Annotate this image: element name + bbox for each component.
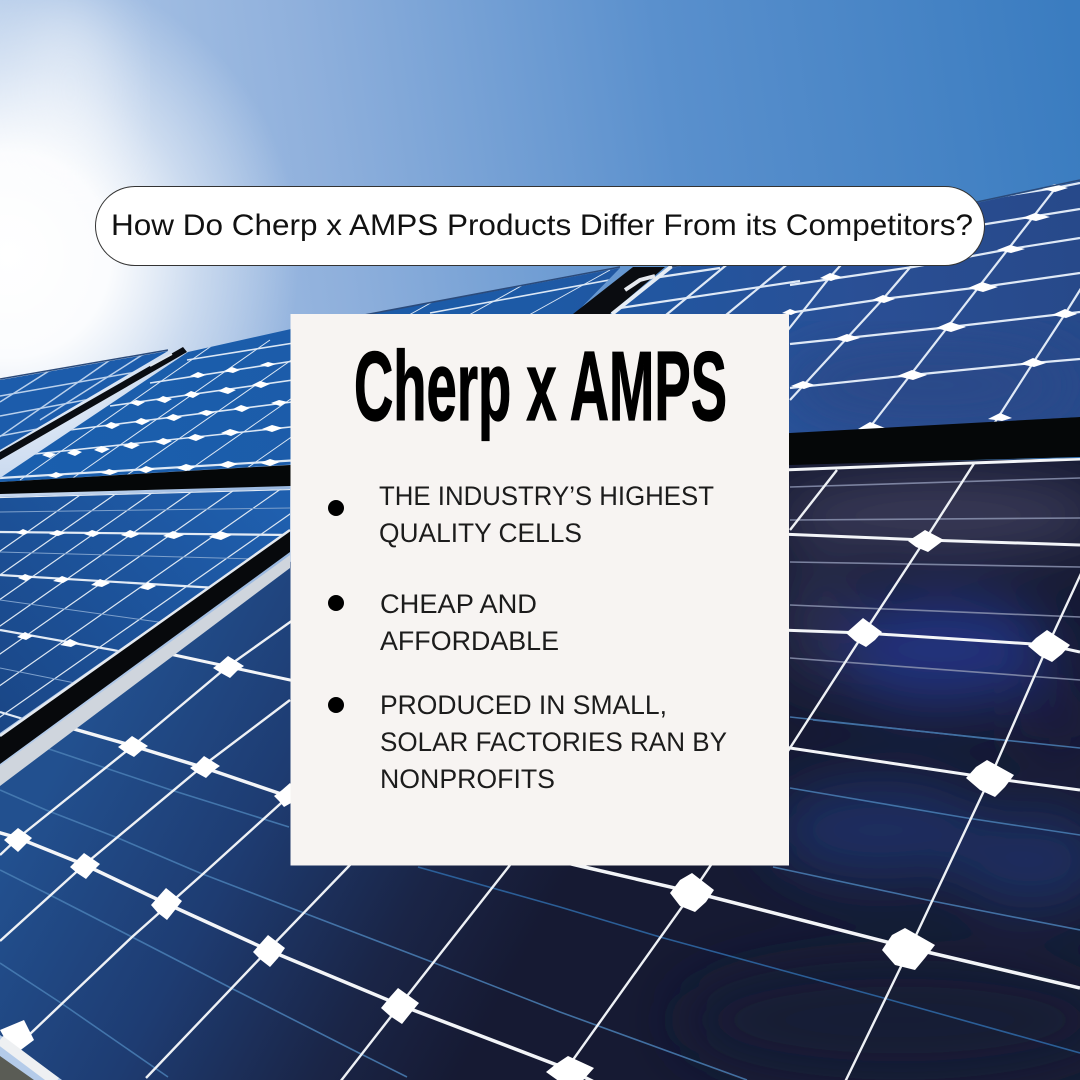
bullet 3: NONPROFITS: [380, 764, 555, 794]
dark gap: horizontal: [0, 417, 1080, 494]
panel top edges: [0, 180, 1080, 379]
panel: upper-left array: [0, 265, 620, 482]
panel: Cherp x AMPS card: [290, 314, 789, 866]
bullet 1: QUALITY CELLS: [379, 518, 582, 548]
panel: large lower array: [0, 458, 1080, 1080]
bullet 2: [328, 589, 559, 656]
panel frame: bottom-left corner: [0, 1040, 56, 1080]
bullet 3: [328, 690, 727, 794]
cell shading: [770, 460, 1080, 934]
cell junction diamonds: [0, 530, 1070, 1080]
dark gap: upper-middle diagonal: [573, 266, 672, 314]
panel: middle-left array: [0, 489, 290, 733]
heading text: How Do Cherp x AMPS Products Differ From its Competitors?: [111, 209, 973, 242]
bullet 2: AFFORDABLE: [380, 626, 559, 656]
bullet 1: [328, 481, 714, 548]
card title: Cherp x AMPS: [354, 331, 727, 441]
bullet 3: PRODUCED IN SMALL,: [380, 690, 667, 720]
bullet 1: THE INDUSTRY’S HIGHEST: [379, 481, 714, 511]
heading pill: [96, 186, 984, 266]
dark gap: lower-left diagonal with rail: [0, 530, 290, 786]
bullet 2: CHEAP AND: [380, 589, 537, 619]
panel: upper-right array: [615, 181, 1080, 433]
bullet 3: SOLAR FACTORIES RAN BY: [380, 727, 727, 757]
panel: far upper-left array: [0, 351, 168, 450]
dark gap: upper-left diagonal: [0, 347, 187, 460]
